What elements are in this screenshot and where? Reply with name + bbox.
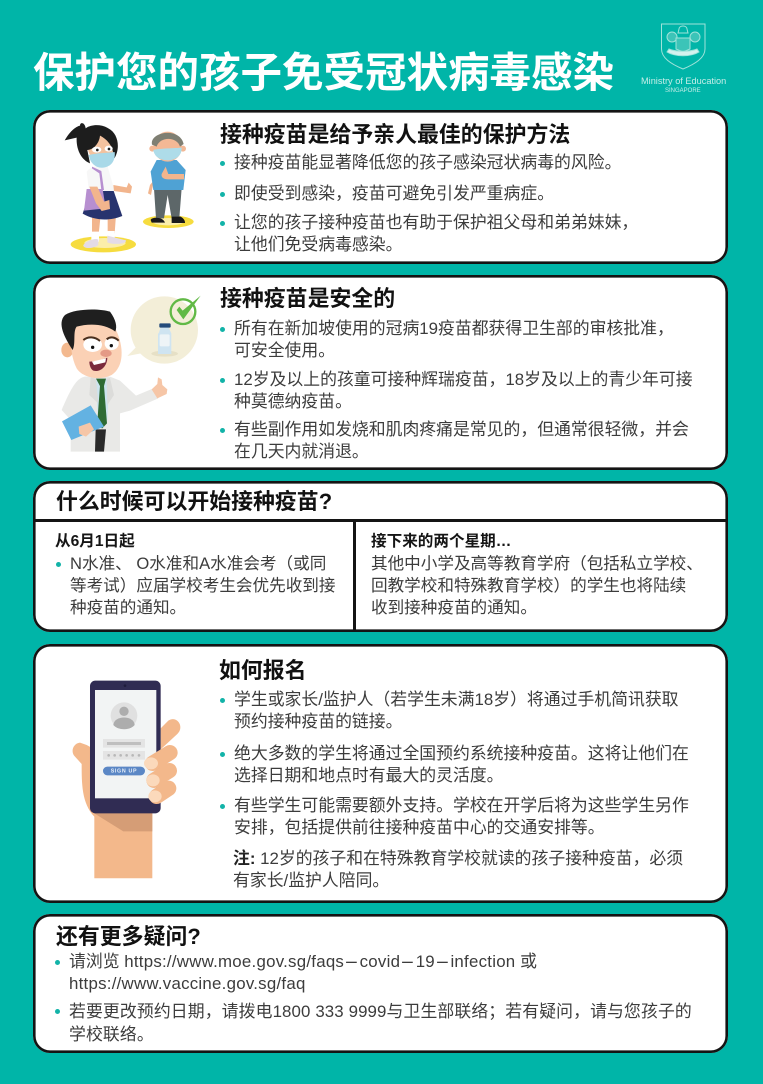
panel: more questions — [33, 914, 728, 1053]
heading: 如何报名 — [219, 658, 307, 683]
bullet: 预约接种疫苗的链接。 — [234, 712, 402, 731]
ministry name: Ministry of Education — [641, 76, 726, 86]
bullet — [220, 369, 693, 413]
phone — [90, 681, 161, 813]
left column — [55, 532, 336, 617]
bullet — [220, 212, 638, 256]
divider horizontal — [33, 519, 728, 522]
bullet — [220, 318, 674, 362]
bullet: 可安全使用。 — [234, 341, 335, 360]
singapore: SINGAPORE — [665, 88, 701, 94]
girl — [71, 236, 136, 252]
bullet: 种疫苗的通知。 — [70, 598, 186, 617]
bullet: websites — [55, 951, 537, 995]
panel: best protection — [33, 110, 728, 264]
heading: 什么时候可以开始接种疫苗? — [56, 489, 332, 514]
subheading: 接下来的两个星期… — [371, 533, 511, 550]
bullet: 在几天内就消退。 — [234, 442, 369, 461]
bullet: N水准、 O水准和A水准会考（或同 — [70, 554, 326, 573]
bullet: 让他们免受病毒感染。 — [234, 235, 402, 254]
bullet: websites: https://www.vaccine.gov.sg/faq — [69, 974, 306, 993]
panel: vaccines are safe — [33, 275, 728, 470]
note: 注: 12岁的孩子和在特殊教育学校就读的孩子接种疫苗，必须 — [233, 849, 683, 868]
bullet: 种莫德纳疫苗。 — [234, 392, 352, 411]
heading: 接种疫苗是安全的 — [220, 286, 395, 311]
body text: 回教学校和特殊教育学校）的学生也将陆续 — [371, 576, 686, 595]
bullet — [56, 553, 336, 619]
icon: crest — [661, 24, 706, 70]
bullet: websites: - — [400, 952, 416, 971]
right column — [371, 532, 703, 617]
note — [233, 849, 683, 890]
bullet: 接种疫苗能显著降低您的孩子感染冠状病毒的风险。 — [234, 153, 621, 172]
bullet: websites: 请浏览 https://www.moe.gov.sg/faqs covid 19 infection 或 — [69, 952, 537, 971]
illustration: hand holding phone: SIGN UP — [111, 769, 137, 775]
note: 有家长/监护人陪同。 — [233, 871, 389, 890]
speech bubble — [131, 296, 198, 364]
bullet: 学生或家长/监护人（若学生未满18岁）将通过手机简讯获取 — [234, 690, 679, 709]
bullet: 有些副作用如发烧和肌肉疼痛是常见的，但通常很轻微，并会 — [234, 420, 689, 439]
heading: 接种疫苗是给予亲人最佳的保护方法 — [220, 122, 570, 147]
bullet — [220, 689, 679, 733]
thumb — [152, 377, 167, 398]
bullet: websites: - — [435, 952, 450, 971]
illustration: girl and grandfather wearing masks — [64, 123, 194, 252]
bullet — [220, 743, 689, 787]
body text: 收到接种疫苗的通知。 — [371, 598, 537, 617]
panel: when to start — [33, 481, 728, 632]
illustration: doctor with vaccine bubble — [61, 296, 200, 452]
head — [61, 343, 73, 357]
title: 保护您的孩子免受冠状病毒感染 — [33, 49, 614, 96]
body text: 其他中小学及高等教育学府（包括私立学校、 — [371, 554, 703, 573]
bullet: 等考试）应届学校考生会优先收到接 — [70, 576, 336, 595]
bullet: contact — [55, 1000, 692, 1046]
bullet: 绝大多数的学生将通过全国预约系统接种疫苗。这将让他们在 — [234, 744, 689, 763]
bullet — [220, 419, 689, 463]
body text — [371, 554, 703, 617]
bullet: 选择日期和地点时有最大的灵活度。 — [234, 766, 504, 785]
bullet: websites: - — [344, 952, 359, 971]
divider vertical — [353, 520, 356, 632]
bullet: 有些学生可能需要额外支持。学校在开学后将为这些学生另作 — [234, 796, 689, 815]
bullet: 所有在新加坡使用的冠病19疫苗都获得卫生部的审核批准， — [234, 319, 674, 338]
avatar — [111, 702, 137, 729]
fingers — [153, 753, 170, 796]
bullet — [220, 795, 689, 839]
bullet: 安排，包括提供前往接种疫苗中心的交通安排等。 — [234, 818, 605, 837]
panel: how to register — [33, 644, 728, 903]
coat — [62, 377, 158, 452]
clipboard — [62, 405, 104, 440]
heading: 还有更多疑问? — [56, 924, 201, 949]
subheading: 从6月1日起 — [55, 533, 135, 550]
bullet: 让您的孩子接种疫苗也有助于保护祖父母和弟弟妹妹， — [234, 213, 638, 232]
illustration: hand holding phone — [72, 680, 180, 878]
logo: Ministry of Education — [641, 24, 726, 94]
sign up button — [103, 767, 145, 775]
bullet: contact: 若要更改预约日期，请拨电1800 333 9999与卫生部联络；若有疑问，请与您孩子的 — [69, 1002, 692, 1021]
bullet: contact: 学校联络。 — [69, 1025, 154, 1044]
arm and palm — [94, 807, 152, 878]
fields — [103, 739, 145, 748]
bullet: 即使受到感染，疫苗可避免引发严重病症。 — [234, 184, 554, 203]
grandfather — [143, 215, 194, 228]
bullet: 12岁及以上的孩童可接种辉瑞疫苗，18岁及以上的青少年可接 — [234, 370, 693, 389]
